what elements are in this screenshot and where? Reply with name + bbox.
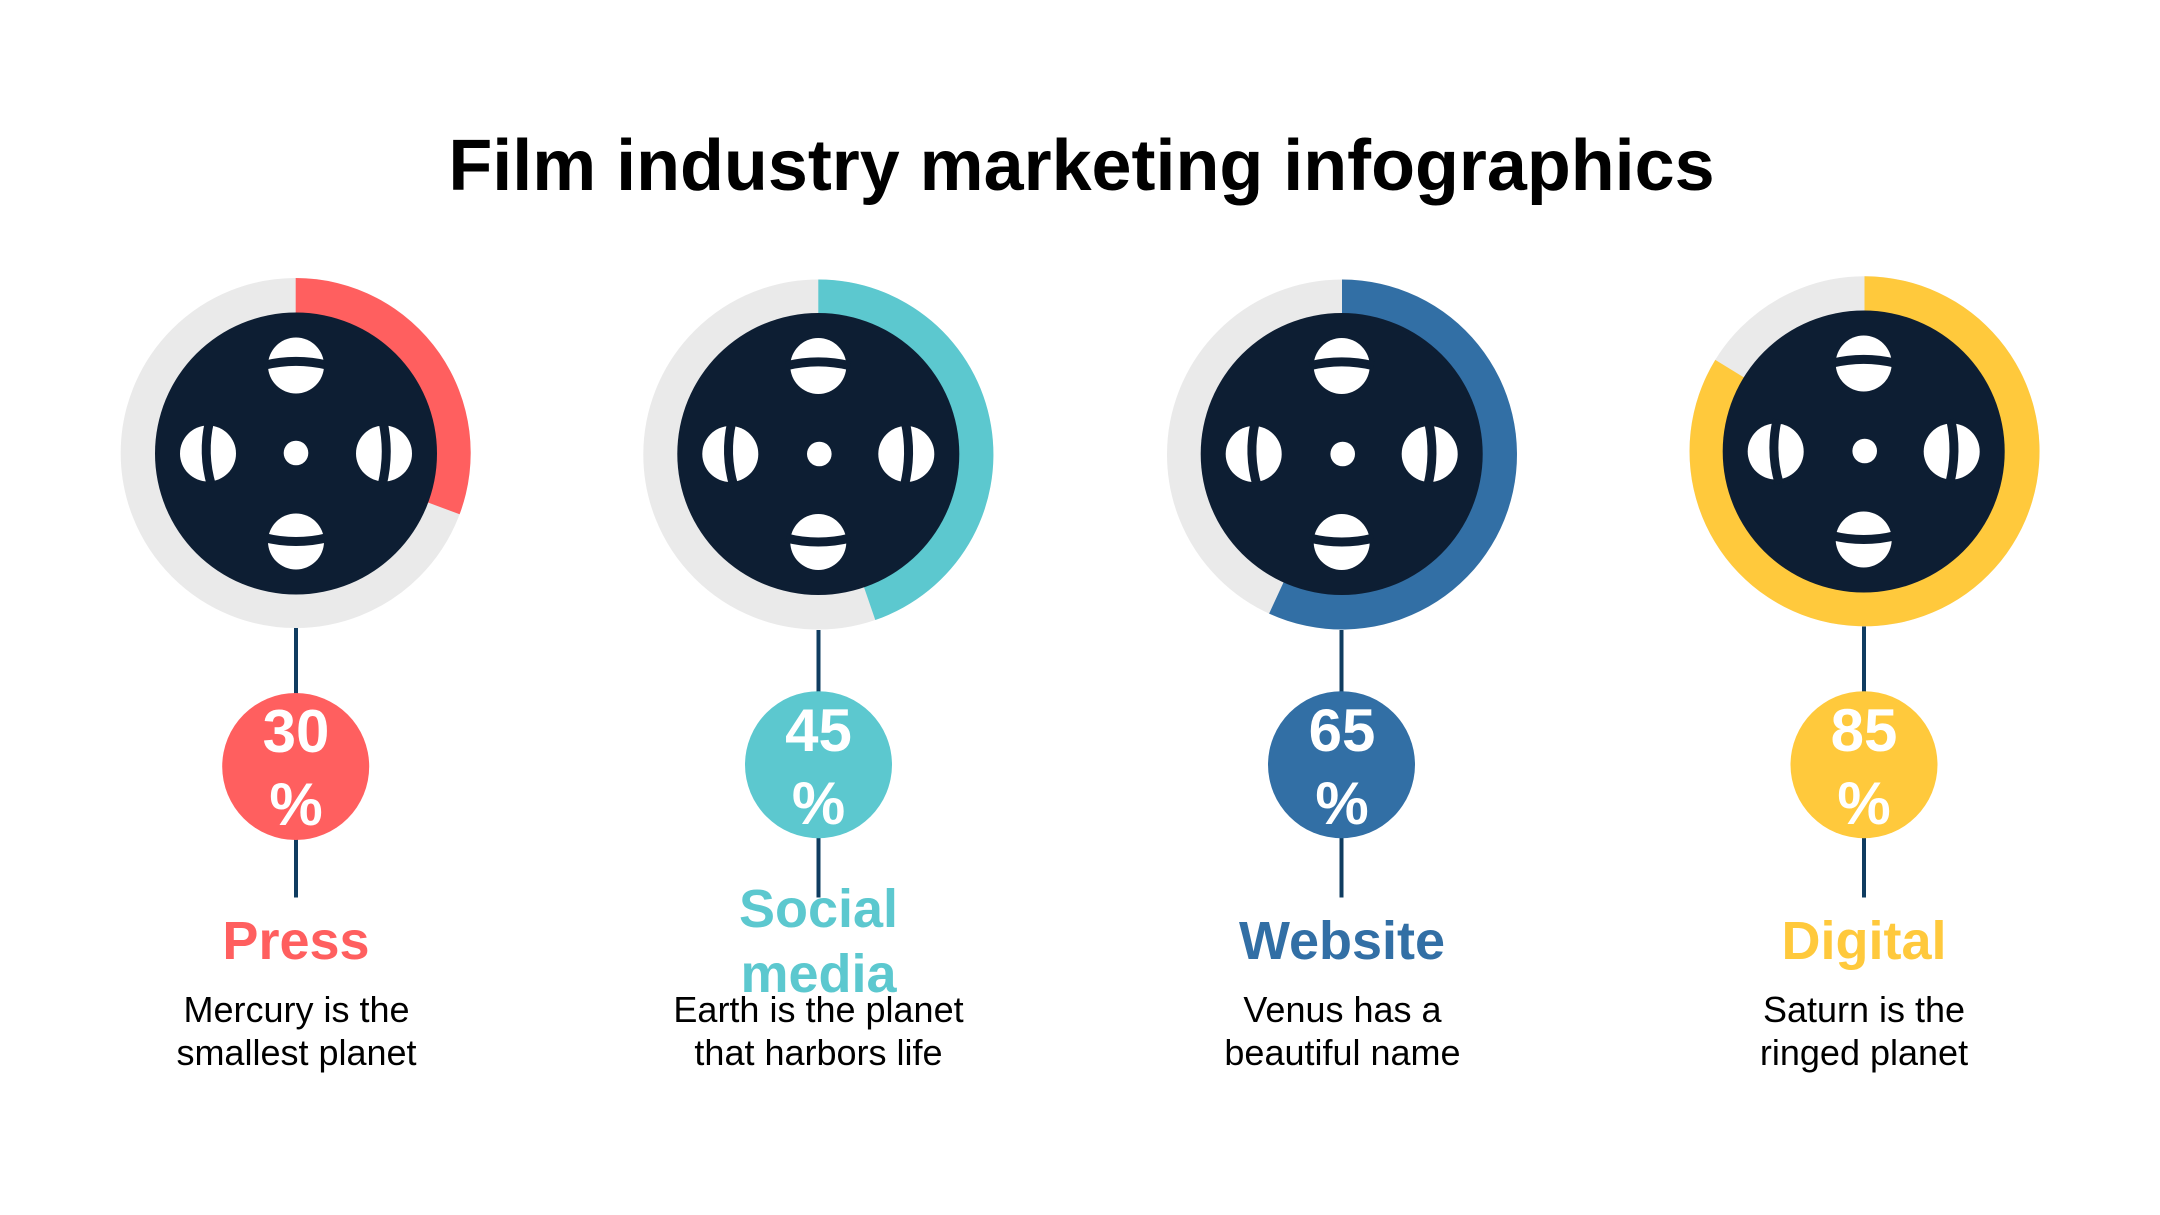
percentage badge: social media: % bbox=[792, 770, 845, 837]
panel: social media bbox=[662, 279, 993, 1073]
percentage badge: digital: 85 bbox=[1831, 697, 1897, 764]
percentage badge: social media bbox=[745, 691, 892, 838]
heading: social media: media bbox=[740, 944, 897, 1004]
connector line: social media bbox=[816, 630, 820, 898]
heading: website: Website bbox=[1239, 911, 1445, 971]
donut chart: website bbox=[1186, 280, 1517, 630]
icon: film reel bbox=[1201, 313, 1483, 595]
description: website: Venus has a bbox=[1243, 989, 1443, 1030]
connector line: website bbox=[1340, 630, 1344, 898]
description: website: beautiful name bbox=[1224, 1032, 1461, 1073]
percentage badge: social media: 45 bbox=[785, 697, 852, 764]
description: digital: Saturn is the bbox=[1763, 989, 1965, 1030]
title: Film industry marketing infographics bbox=[448, 126, 1715, 206]
percentage badge: website: 65 bbox=[1309, 697, 1375, 764]
percentage badge: press bbox=[222, 693, 369, 840]
description: press: Mercury is the bbox=[183, 989, 410, 1030]
percentage badge: digital: % bbox=[1837, 770, 1891, 837]
description: digital: ringed planet bbox=[1760, 1032, 1968, 1073]
description: social media: that harbors life bbox=[694, 1032, 943, 1073]
heading: press: Press bbox=[222, 911, 370, 971]
icon: film reel bbox=[1723, 310, 2005, 592]
icon: film reel bbox=[677, 313, 959, 595]
description: press: smallest planet bbox=[176, 1032, 417, 1073]
panel: website bbox=[1186, 280, 1517, 1073]
percentage badge: website bbox=[1268, 691, 1415, 838]
donut chart: press bbox=[140, 278, 471, 609]
heading: digital: Digital bbox=[1781, 911, 1947, 971]
panel: press bbox=[140, 278, 471, 1073]
icon: film reel bbox=[155, 312, 437, 594]
donut chart: social media bbox=[662, 279, 993, 620]
connector line: press bbox=[294, 628, 298, 898]
description: social media: Earth is the planet bbox=[673, 989, 964, 1030]
connector line: digital bbox=[1862, 626, 1866, 898]
percentage badge: press: 30 bbox=[263, 698, 329, 765]
percentage badge: website: % bbox=[1315, 770, 1369, 837]
percentage badge: press: % bbox=[269, 771, 323, 838]
heading: social media: Social bbox=[739, 879, 898, 939]
donut chart: digital bbox=[1690, 276, 2040, 626]
percentage badge: digital bbox=[1790, 691, 1938, 838]
panel: digital bbox=[1690, 276, 2040, 1073]
